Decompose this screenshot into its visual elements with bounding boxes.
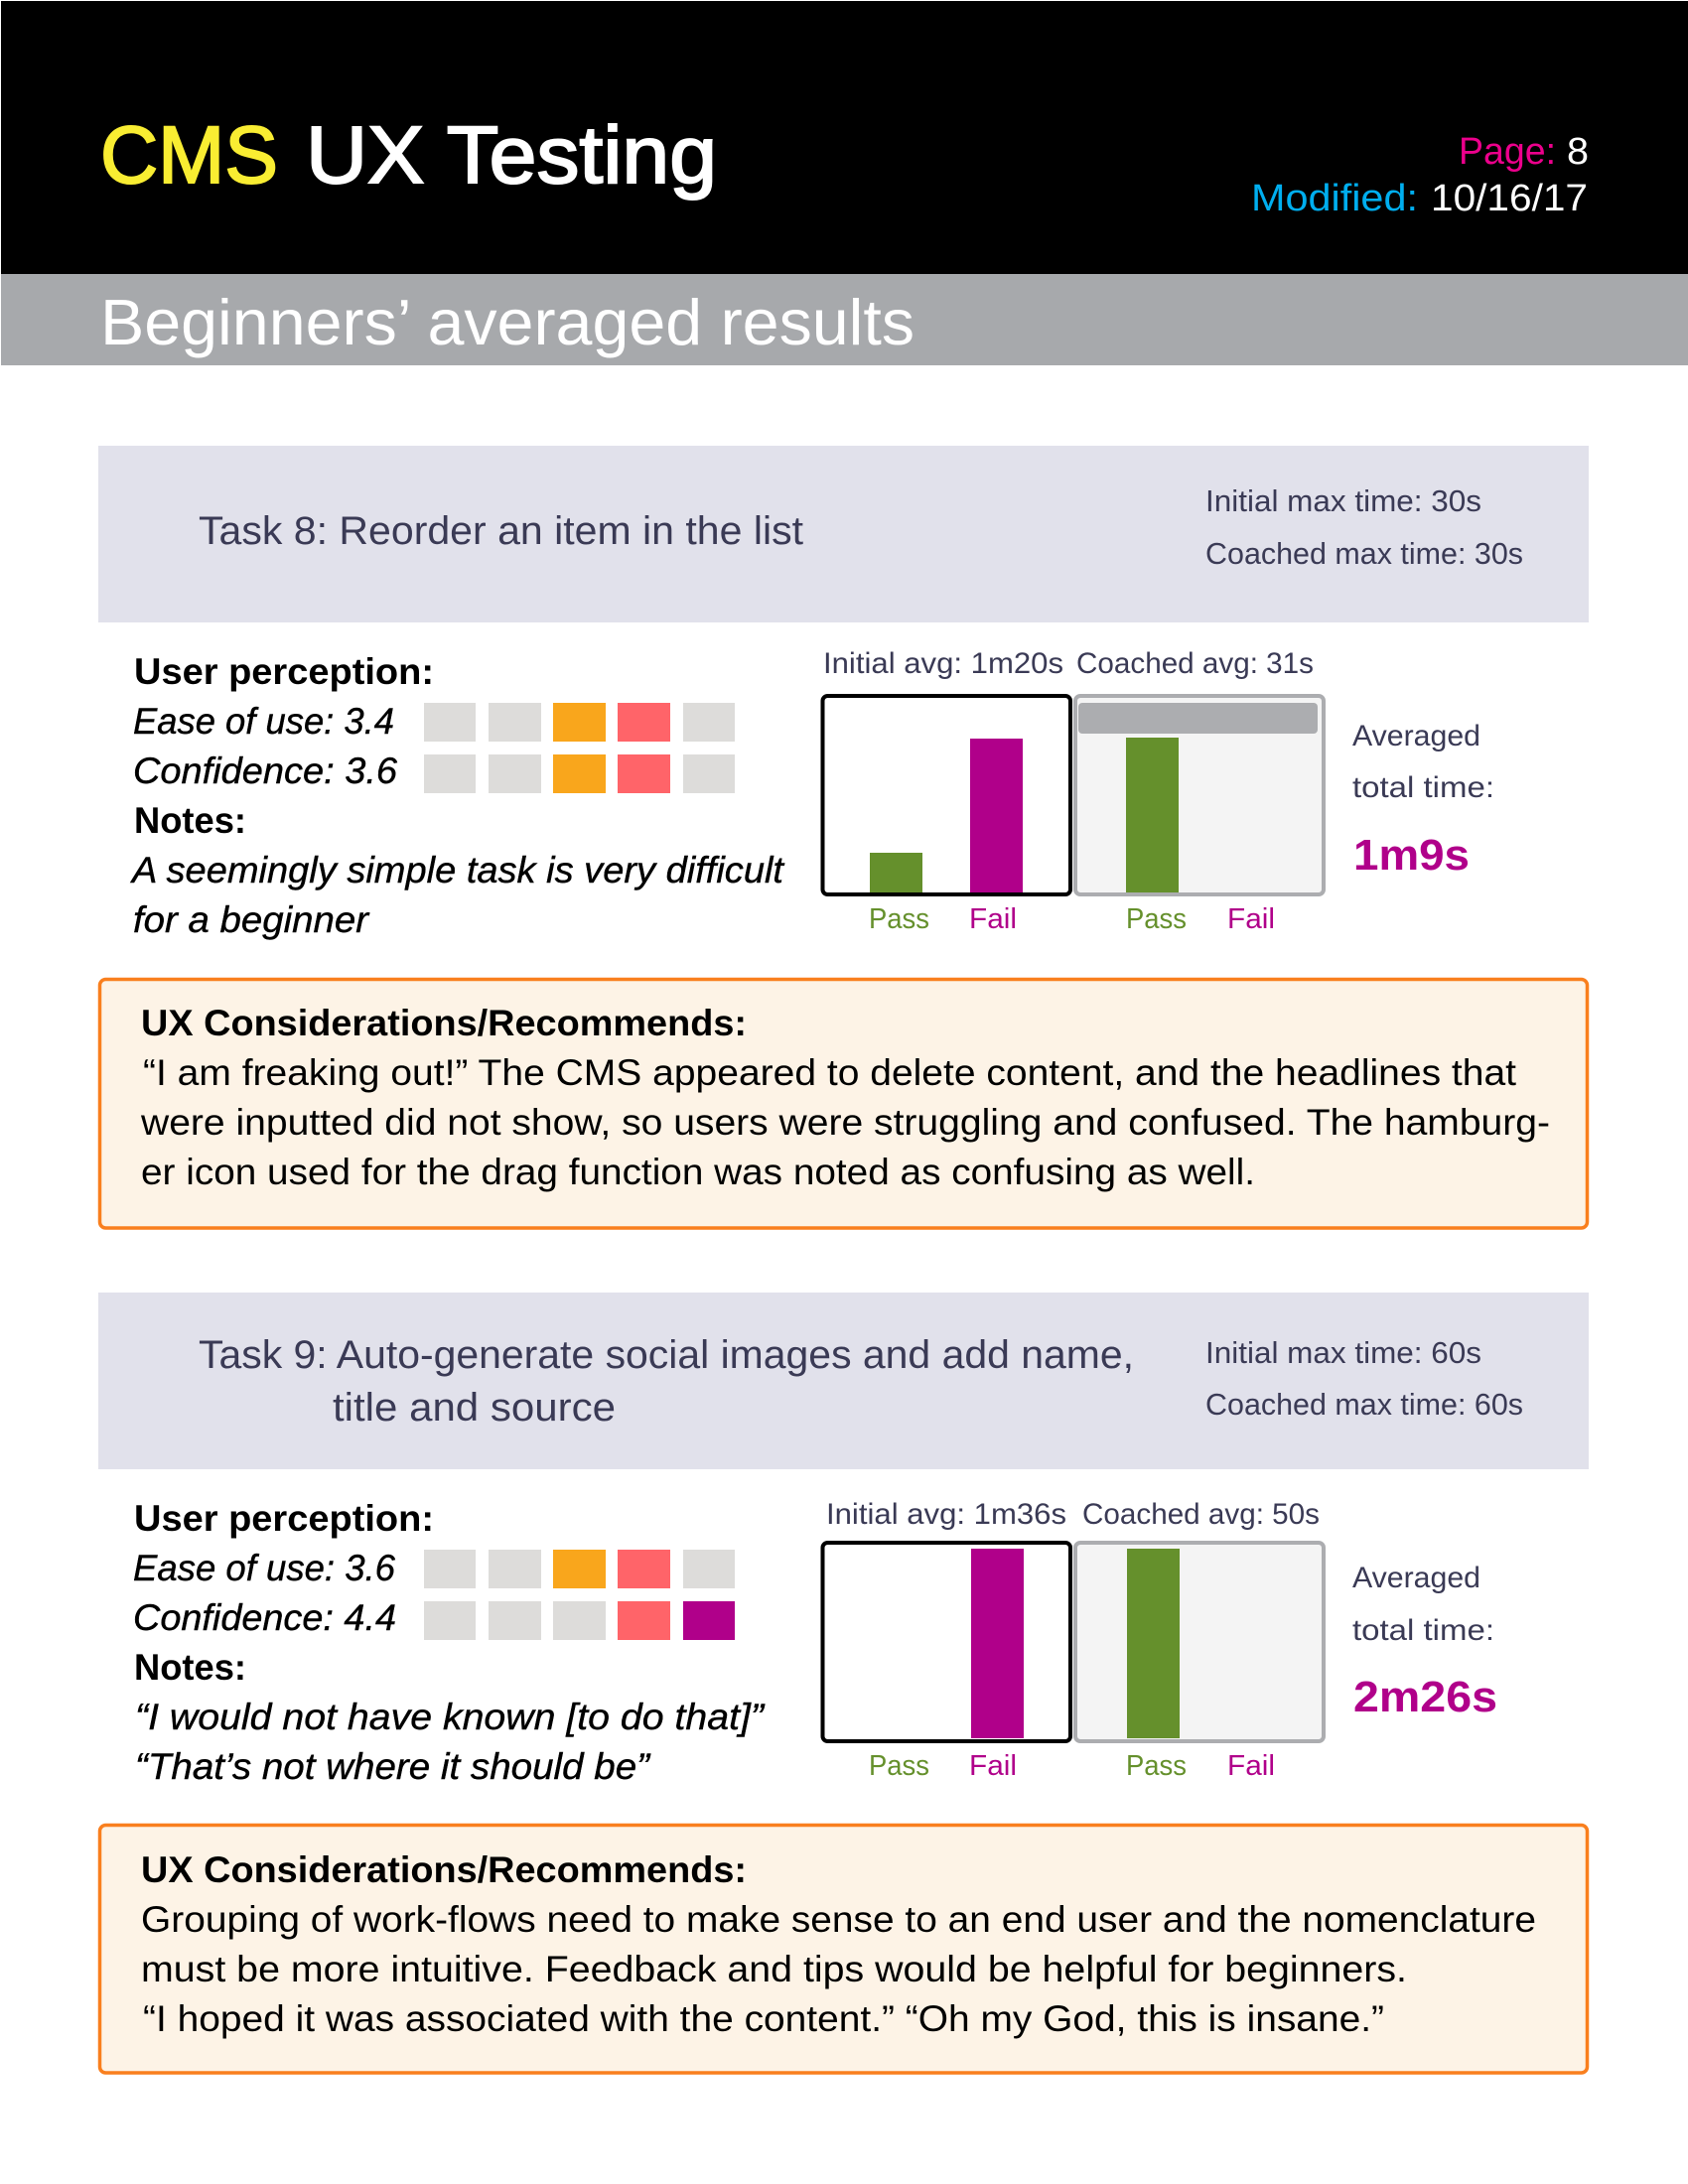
callout: task 9 recommendations: UX Considerations/Recommends: xyxy=(141,1849,747,1890)
bar chart: task 9 coached: Pass xyxy=(1126,1750,1187,1782)
panel: task 8 user perception: Notes: xyxy=(134,800,246,841)
bar chart: task 9 coached: Fail xyxy=(1227,1750,1275,1782)
panel: task 8 user perception xyxy=(130,651,785,940)
panel: task 8 header: Initial max time: 30s xyxy=(1205,483,1481,518)
panel: task 9 header xyxy=(98,1293,1589,1469)
panel: task 9 user perception: User perception: xyxy=(134,1498,434,1539)
averaged total time: task 8: 1m9s xyxy=(1353,831,1470,880)
panel: task 8 user perception: Confidence: 3.6 xyxy=(133,751,397,791)
callout: task 9 recommendations xyxy=(99,1825,1587,2073)
bar chart: task 9 initial xyxy=(822,1498,1070,1782)
callout: task 8 recommendations: UX Considerations/Recommends: xyxy=(141,1003,747,1043)
callout: task 9 recommendations: “I hoped it was associated with the content.” “Oh my God, this is insane.” xyxy=(143,1998,1384,2039)
panel: task 8 user perception: A seemingly simple task is very difficult xyxy=(130,850,785,890)
panel: task 8 header: Coached max time: 30s xyxy=(1205,536,1523,571)
rating squares: ease of use xyxy=(424,703,735,742)
panel: task 8 header: Task 8: Reorder an item in the list xyxy=(199,509,803,553)
averaged total time: task 8 xyxy=(1352,720,1494,880)
bar chart: task 9 coached xyxy=(1075,1498,1324,1782)
subtitle band xyxy=(1,274,1688,365)
callout: task 9 recommendations: must be more intuitive. Feedback and tips would be helpful for beginners. xyxy=(141,1949,1407,1989)
modified date: Modified: xyxy=(1251,178,1418,219)
bar chart: task 9 initial: Initial avg: 1m36s xyxy=(826,1498,1066,1531)
bar chart: task 8 coached: Coached avg: 31s xyxy=(1076,647,1314,680)
averaged total time: task 8: Averaged xyxy=(1352,720,1480,752)
averaged total time: task 9 xyxy=(1352,1562,1497,1721)
callout: task 9 recommendations: Grouping of work-flows need to make sense to an end user and the nomenclature xyxy=(141,1899,1536,1940)
averaged total time: task 9: total time: xyxy=(1352,1614,1494,1647)
bar chart: task 8 coached xyxy=(1075,647,1324,935)
title xyxy=(100,110,717,201)
modified date: 10/16/17 xyxy=(1431,178,1588,219)
panel: task 9 user perception: “That’s not where it should be” xyxy=(135,1746,651,1787)
bar chart: task 8 initial: Initial avg: 1m20s xyxy=(823,647,1063,680)
callout: task 8 recommendations: were inputted did not show, so users were struggling and confused. The hamburg- xyxy=(140,1102,1550,1143)
modified date xyxy=(1251,178,1588,219)
page number: 8 xyxy=(1567,131,1589,173)
bar chart: task 8 coached: Fail xyxy=(1227,903,1275,935)
bar chart: task 9 initial: Fail xyxy=(969,1750,1017,1782)
bar chart: task 8 initial xyxy=(822,647,1070,935)
panel: task 9 user perception: “I would not have known [to do that]” xyxy=(135,1697,766,1737)
panel: task 9 header: Coached max time: 60s xyxy=(1205,1387,1523,1422)
panel: task 8 user perception: Ease of use: 3.4 xyxy=(133,701,394,742)
averaged total time: task 8: total time: xyxy=(1352,771,1494,804)
title: UX Testing xyxy=(306,110,717,201)
bar chart: task 9 coached: Coached avg: 50s xyxy=(1082,1498,1320,1531)
callout: task 8 recommendations: “I am freaking out!” The CMS appeared to delete content, and the headlines that xyxy=(143,1052,1517,1093)
rating squares: ease of use xyxy=(424,1550,735,1588)
header band xyxy=(1,1,1688,274)
callout: task 8 recommendations: er icon used for the drag function was noted as confusing as well. xyxy=(141,1152,1255,1192)
rating squares: confidence xyxy=(424,754,735,793)
panel: task 8 user perception: User perception: xyxy=(134,651,434,692)
page number: Page: xyxy=(1459,131,1556,173)
bar chart: task 8 initial: Pass xyxy=(869,903,929,935)
panel: task 9 header: Task 9: Auto-generate social images and add name, xyxy=(199,1333,1134,1377)
rating squares: confidence xyxy=(424,1601,735,1640)
panel: task 8 user perception: for a beginner xyxy=(133,899,370,940)
panel: task 9 user perception: Ease of use: 3.6 xyxy=(133,1548,395,1588)
bar chart: task 8 initial: Fail xyxy=(969,903,1017,935)
panel: task 9 user perception xyxy=(133,1498,766,1787)
averaged total time: task 9: 2m26s xyxy=(1353,1673,1497,1721)
title: CMS xyxy=(100,110,278,201)
bar chart: task 9 initial: Pass xyxy=(869,1750,929,1782)
averaged total time: task 9: Averaged xyxy=(1352,1562,1480,1594)
panel: task 9 user perception: Confidence: 4.4 xyxy=(133,1597,396,1638)
subtitle band: Beginners’ averaged results xyxy=(100,286,914,358)
panel: task 9 header: Initial max time: 60s xyxy=(1205,1335,1481,1370)
bar chart: task 8 coached: Pass xyxy=(1126,903,1187,935)
panel: task 9 user perception: Notes: xyxy=(134,1647,246,1688)
panel: task 8 header xyxy=(98,446,1589,622)
callout: task 8 recommendations xyxy=(99,979,1587,1228)
panel: task 9 header: title and source xyxy=(333,1386,616,1430)
